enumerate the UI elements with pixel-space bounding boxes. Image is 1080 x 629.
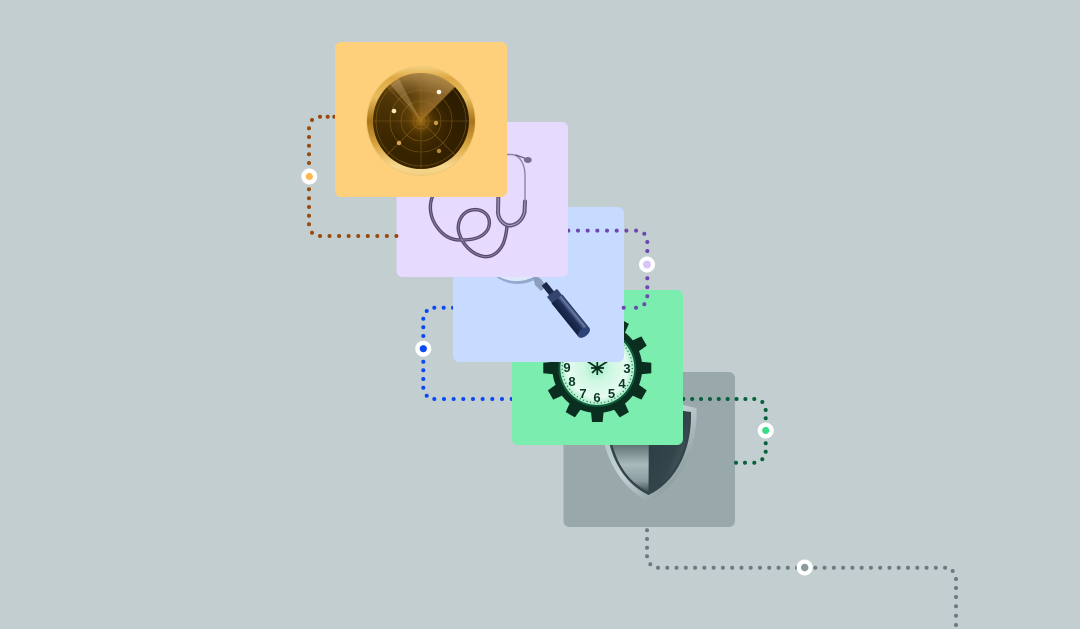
card: blue magnifier (453, 207, 624, 362)
clock numerals: 9 (563, 360, 571, 375)
clock numerals: 4 (618, 376, 626, 391)
icon: magnifying glass (488, 265, 592, 340)
clock numerals: 7 (579, 386, 587, 401)
clock numerals (563, 360, 631, 405)
icon: radar (367, 67, 475, 175)
icon: gear clock (543, 314, 651, 422)
card: orange radar (335, 42, 507, 197)
icon: stethoscope (430, 154, 532, 257)
dotted path: orange (307, 115, 397, 236)
dotted path: gray (645, 528, 958, 627)
icon: shield (600, 392, 697, 502)
clock numerals: 6 (593, 390, 601, 405)
dotted path: green (683, 399, 768, 465)
node: gray (797, 560, 813, 576)
clock hands (587, 359, 608, 375)
node: orange (301, 168, 317, 184)
card: gray shield (564, 372, 735, 527)
clock numerals: 3 (623, 361, 631, 376)
clock numerals: 8 (568, 374, 576, 389)
node: green (758, 422, 774, 438)
dotted path: purple (568, 231, 649, 310)
card: green clock (512, 290, 683, 445)
card: purple stethoscope (396, 122, 568, 277)
node: purple (639, 256, 655, 272)
dotted path: blue (421, 306, 513, 399)
node: blue (415, 341, 431, 357)
clock numerals: 5 (608, 386, 615, 401)
